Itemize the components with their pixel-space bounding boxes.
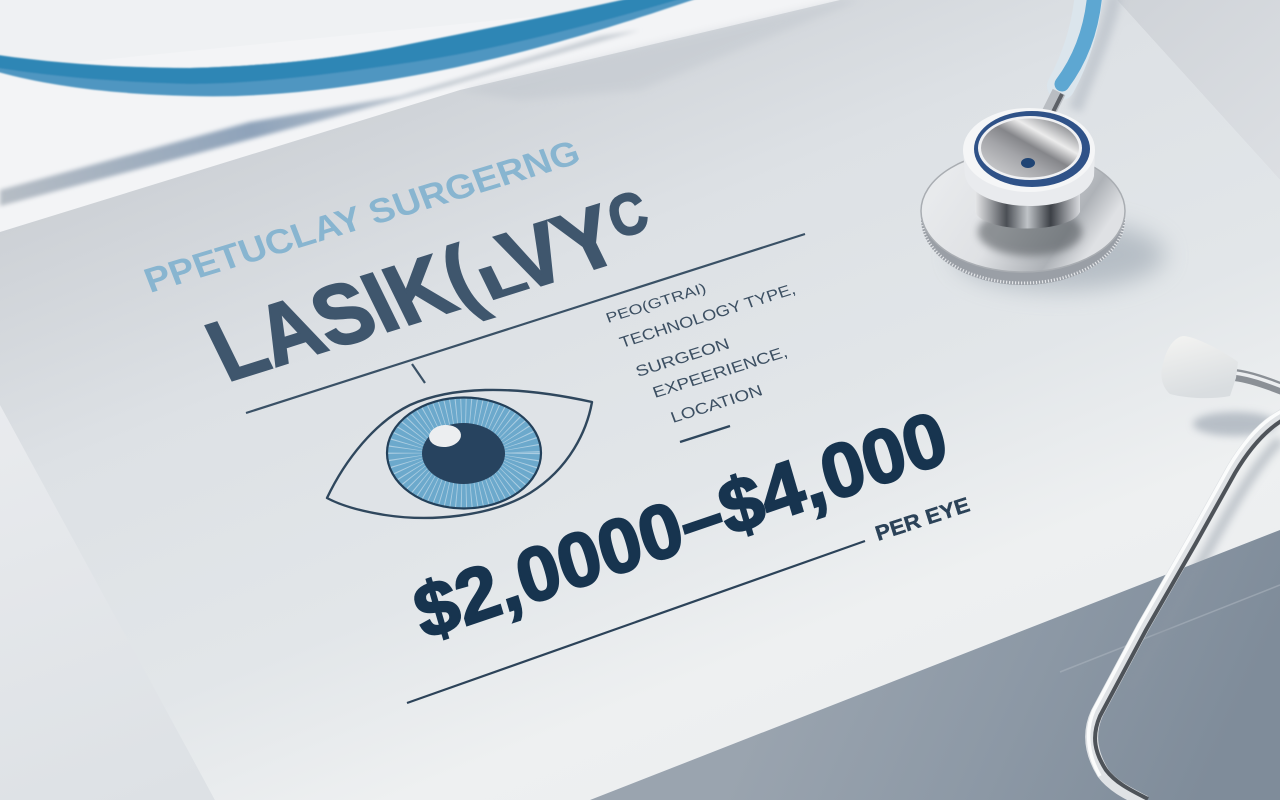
iris: [387, 398, 541, 508]
white ear tip: [1161, 336, 1238, 398]
stethoscope ear tip and tube: [1089, 336, 1280, 800]
iris rays: [404, 408, 524, 498]
eye outline: [327, 390, 592, 518]
pupil: [422, 423, 505, 484]
back sheet of paper: [0, 0, 840, 232]
blue tube core: [1062, 0, 1095, 84]
cylinder: [975, 180, 1080, 228]
metal stem: [1048, 92, 1059, 114]
factors list: [603, 280, 798, 427]
rule tick: [412, 364, 425, 383]
catchlight: [428, 424, 462, 448]
iris outline: [387, 398, 541, 508]
centre dot: [1021, 158, 1035, 168]
blue ring: [974, 111, 1090, 187]
paper top edge shading: [460, 0, 860, 100]
eyebrow heading: PPETUCLAY SURGERNG: [139, 133, 585, 300]
cap side: [963, 150, 1095, 206]
list line 4: EXPEERIENCE,: [650, 344, 790, 402]
dark table corner: [590, 530, 1280, 800]
title part: VY: VY: [485, 186, 635, 309]
base disc edge: [921, 153, 1125, 285]
icon: eye: [327, 390, 592, 518]
title part: small L: L: [472, 250, 534, 309]
list line 5: LOCATION: [668, 382, 765, 427]
metal tube body: [1092, 414, 1280, 800]
upper right table surface: [1117, 0, 1280, 180]
metal tube shadow: [1130, 440, 1280, 690]
ear tip shadow: [1193, 412, 1277, 436]
per eye label: PER EYE: [873, 493, 973, 546]
sheet shadow band: [0, 30, 640, 206]
stethoscope chest piece shadow: [955, 220, 1165, 290]
title rule: [246, 234, 805, 413]
list underline: [680, 426, 730, 442]
metal tube highlight: [1089, 411, 1280, 776]
list line 3: SURGEON: [633, 336, 732, 381]
base disc: [921, 150, 1125, 272]
upper metal arm: [1235, 375, 1280, 390]
white inner ring: [978, 116, 1082, 180]
title part: raised C: C: [601, 179, 655, 251]
translucent tube sheath: [1061, 0, 1089, 86]
disc reflection: [978, 208, 1082, 256]
metal cup: [981, 118, 1079, 178]
metal tube dark core: [1095, 417, 1280, 799]
stethoscope chest piece: [921, 0, 1125, 285]
main title: [192, 179, 655, 399]
cap top: [963, 108, 1095, 192]
table reflection line: [1060, 585, 1280, 672]
price: $2,0000–$4,000: [405, 395, 957, 656]
stethoscope tube: top arc: [0, 0, 704, 96]
knurled edge: [922, 155, 1124, 283]
title part: LASIK: LASIK(: [192, 228, 495, 399]
price rule: [407, 541, 865, 703]
lower left table surface: [0, 400, 215, 800]
tube shadow upper right: [1075, 0, 1115, 110]
list line 1: PEO(GTRAI): [603, 280, 708, 326]
list line 2: TECHNOLOGY TYPE,: [617, 281, 798, 352]
